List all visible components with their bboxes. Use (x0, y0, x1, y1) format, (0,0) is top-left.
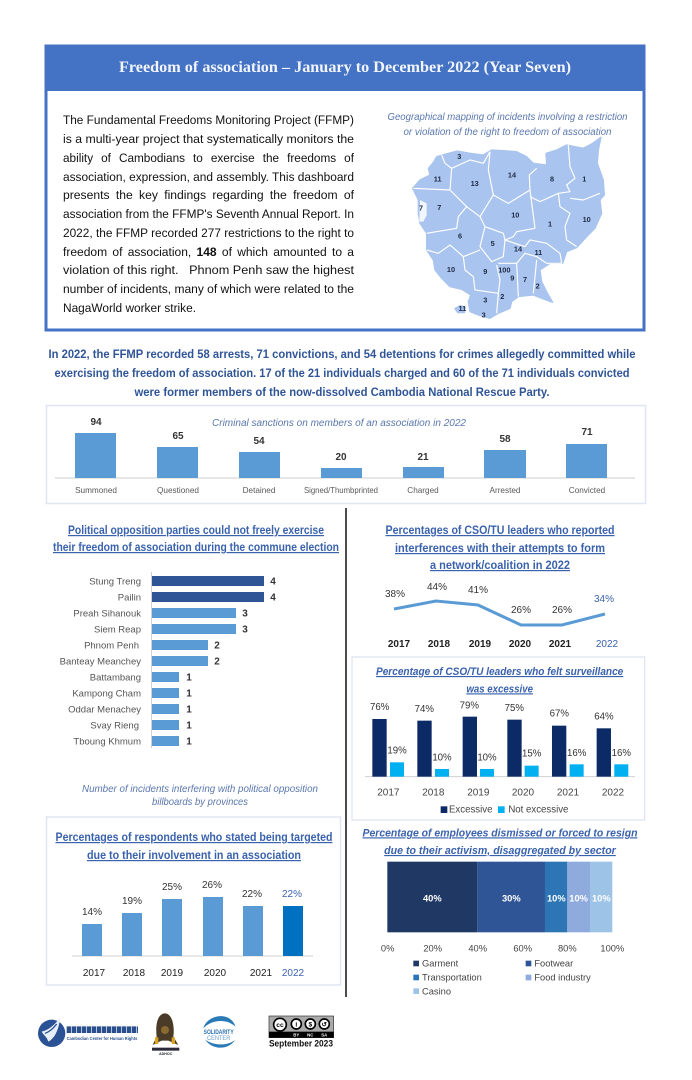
logo: ADHOC (152, 1013, 179, 1056)
logo: Solidarity Center (203, 1016, 236, 1048)
panel: employees dismissed by sector (362, 827, 637, 996)
map of Cambodia by province: 13 (471, 179, 479, 188)
caption: billboards (82, 784, 318, 808)
panel: respondents targeted: 2022 (282, 968, 305, 979)
panel: criminal sanctions bar chart: 65 (172, 431, 184, 442)
legend: Garment (422, 959, 459, 969)
line chart: network interference: 2017 (388, 639, 411, 650)
horizontal bar chart: incidents by province: Battambang (90, 672, 141, 684)
heading: network/coalition interference: a network/coalition in 2022 (430, 558, 570, 572)
map of Cambodia by province: 5 (491, 239, 495, 248)
panel heading: due to their activism, disaggregated by sector (384, 845, 616, 857)
logo: Cambodian Center for Human Rights: Cambodian Center for Human Rights (67, 1036, 138, 1041)
horizontal bar chart: incidents by province: 1 (186, 704, 192, 716)
line chart: network interference: 2022 (596, 639, 619, 650)
stacked bar: 30% (502, 893, 521, 903)
panel: criminal sanctions bar chart: 58 (499, 434, 511, 445)
panel: respondents targeted: 2019 (161, 968, 184, 979)
horizontal bar chart: incidents by province: 3 (242, 608, 248, 620)
panel: respondents targeted (46, 817, 340, 985)
map of Cambodia by province: 10 (447, 265, 455, 274)
panel: criminal sanctions bar chart: Questioned (157, 486, 199, 495)
map of Cambodia by province: 10 (511, 211, 519, 220)
intro text block: association, expression, and assembly. This dashboard (63, 170, 354, 184)
stacked bar (387, 862, 612, 932)
legend: Food industry (534, 973, 591, 983)
panel: surveillance bar chart: 10% (432, 753, 452, 764)
map of Cambodia by province: 2 (500, 292, 504, 301)
panel heading: Percentages of respondents who stated being targeted (56, 830, 332, 844)
map of Cambodia by province: 14 (514, 244, 523, 253)
panel: criminal sanctions bar chart: Summoned (75, 486, 117, 495)
horizontal bar chart: incidents by province (60, 572, 276, 748)
panel: employees dismissed by sector: 40% (468, 943, 487, 953)
map of Cambodia by province: 6 (458, 232, 462, 241)
intro text block: NagaWorld worker strike. (63, 301, 196, 315)
panel: surveillance bar chart: 19% (387, 746, 407, 757)
line chart: network interference: 26% (511, 605, 531, 616)
license badge and date (269, 1016, 334, 1049)
license badge and date: September 2023 (269, 1039, 333, 1049)
intro text block: The Fundamental Freedoms Monitoring Project (FFMP) (63, 113, 354, 127)
caption: billboards: billboards by provinces (152, 797, 248, 808)
logo: Solidarity Center: CENTER (207, 1036, 231, 1042)
line chart: network interference: 44% (427, 582, 447, 593)
horizontal bar chart: incidents by province: Siem Reap (94, 624, 141, 636)
map caption: Geographical mapping of incidents involving a restriction (388, 112, 628, 123)
panel heading: due to their involvement in an association (87, 848, 301, 862)
panel: criminal sanctions bar chart: 21 (417, 452, 429, 463)
map of Cambodia by province: 14 (508, 171, 517, 180)
panel: respondents targeted: 22% (282, 889, 302, 900)
panel: respondents targeted: 2018 (123, 968, 146, 979)
license badge and date: cc (276, 1022, 284, 1029)
line chart: network interference: 34% (594, 594, 614, 605)
map of Cambodia by province: 10 (583, 215, 591, 224)
panel: introduction and map (45, 45, 645, 330)
horizontal bar chart: incidents by province: Phnom Penh (84, 640, 139, 652)
intro text block: freedom of association, 148 of which amounted to a (63, 245, 354, 259)
intro text block: ability of Cambodians to exercise the freedoms of (63, 151, 355, 165)
license badge and date: NC (307, 1032, 313, 1037)
line chart: network interference: 2018 (428, 639, 451, 650)
panel: criminal sanctions bar chart: 94 (90, 417, 102, 428)
horizontal bar chart: incidents by province: 4 (270, 576, 276, 588)
legend: Transportation (422, 973, 482, 983)
license badge and date: BY (293, 1032, 299, 1037)
horizontal bar chart: incidents by province: 1 (186, 736, 192, 748)
panel: respondents targeted: 22% (242, 889, 262, 900)
title banner: Freedom of association – January to December 2022 (Year Seven) (119, 59, 571, 76)
map of Cambodia by province: 1 (582, 175, 586, 184)
panel: surveillance bar chart: 16% (612, 748, 631, 759)
panel: surveillance bar chart: 2019 (467, 788, 490, 799)
map of Cambodia by province: 7 (419, 204, 423, 213)
line chart: network interference: 26% (552, 605, 572, 616)
license badge and date: i (295, 1022, 297, 1029)
horizontal bar chart: incidents by province: Pailin (118, 592, 141, 604)
lead statement: In 2022, the FFMP recorded 58 arrests, 71 convictions, and 54 detentions for crimes allegedly committed while (48, 347, 636, 361)
panel: surveillance bar chart: 2018 (422, 788, 445, 799)
panel: surveillance bar chart: 64% (594, 711, 614, 722)
panel: surveillance bar chart: 75% (505, 703, 524, 714)
map of Cambodia by province: 11 (534, 248, 542, 257)
intro text block: violation of this right. Phnom Penh saw the highest (63, 263, 355, 277)
panel: criminal sanctions bar chart: 54 (253, 436, 265, 447)
line chart: network interference (385, 582, 619, 650)
logo: ADHOC: ADHOC (159, 1052, 173, 1056)
map of Cambodia by province: 3 (482, 310, 486, 319)
panel heading: Percentage of employees dismissed or forced to resign (362, 827, 637, 839)
panel: surveillance bar chart: 15% (522, 749, 542, 760)
panel heading (362, 827, 637, 857)
panel heading: Percentage of CSO/TU leaders who felt surveillance (376, 666, 624, 678)
lead statement: were former members of the now-dissolved Cambodia National Rescue Party. (134, 385, 550, 399)
panel: surveillance bar chart: 10% (477, 753, 497, 764)
legend: Not excessive (508, 805, 568, 816)
caption: billboards: Number of incidents interfering with political opposition (82, 784, 318, 795)
horizontal bar chart: incidents by province: Stung Treng (89, 576, 141, 588)
map of Cambodia by province: 3 (483, 296, 487, 305)
panel: surveillance bar chart: 67% (550, 709, 569, 720)
logo: Cambodian Center for Human Rights (38, 1017, 138, 1047)
legend: Casino (422, 986, 451, 996)
horizontal bar chart: incidents by province: 1 (186, 672, 192, 684)
panel: respondents targeted: 2021 (250, 968, 273, 979)
intro text block: is a multi-year project that systematically monitors the (63, 132, 354, 146)
stacked bar: 40% (423, 893, 442, 903)
map of Cambodia by province: 7 (437, 203, 441, 212)
panel: surveillance bar chart: 16% (567, 748, 587, 759)
panel: surveillance bar chart: 76% (370, 702, 390, 713)
license badge and date: ↺ (322, 1022, 328, 1029)
horizontal bar chart: incidents by province: 1 (186, 720, 192, 732)
legend (413, 959, 591, 996)
panel: criminal sanctions bar chart: Convicted (569, 486, 606, 495)
panel: employees dismissed by sector: 0% (381, 943, 394, 953)
line chart: network interference: 41% (468, 585, 488, 596)
title banner (45, 45, 645, 91)
intro text block (63, 113, 355, 315)
logo: Solidarity Center: SOLIDARITY (204, 1029, 234, 1036)
lead statement (48, 347, 636, 399)
legend: Excessive (449, 805, 492, 816)
horizontal bar chart: incidents by province: 2 (214, 640, 220, 652)
panel: respondents targeted: 25% (162, 882, 182, 893)
panel heading (56, 830, 332, 862)
panel: respondents targeted: 19% (122, 896, 142, 907)
horizontal bar chart: incidents by province: 3 (242, 624, 248, 636)
intro text block: number of incidents, many of which were related to the (63, 282, 354, 296)
horizontal bar chart: incidents by province: Preah Sihanouk (73, 608, 141, 620)
map of Cambodia by province (413, 137, 604, 319)
map of Cambodia by province: 9 (483, 267, 487, 276)
panel: surveillance bar chart (352, 657, 645, 820)
panel heading: was excessive (466, 683, 533, 695)
panel: criminal sanctions bar chart: Charged (407, 486, 439, 495)
panel: surveillance bar chart: 2021 (557, 788, 580, 799)
heading: political opposition: Political opposition parties could not freely exercise (68, 523, 324, 537)
panel: criminal sanctions bar chart: Signed/Thumbprinted (304, 486, 378, 495)
stacked bar: 10% (547, 893, 566, 903)
panel: employees dismissed by sector: 80% (558, 943, 577, 953)
horizontal bar chart: incidents by province: Banteay Meanchey (60, 656, 141, 668)
panel: respondents targeted: 26% (202, 880, 222, 891)
line chart: network interference: 38% (385, 589, 405, 600)
stacked bar: 10% (592, 893, 611, 903)
panel: surveillance bar chart: 79% (460, 700, 479, 711)
map of Cambodia by province: 9 (510, 273, 514, 282)
stacked bar: 10% (569, 893, 589, 903)
panel: criminal sanctions bar chart: 71 (581, 427, 593, 438)
map of Cambodia by province: 7 (523, 275, 527, 284)
panel: surveillance bar chart: 2020 (512, 788, 535, 799)
horizontal bar chart: incidents by province: 1 (186, 688, 192, 700)
intro text block: presents the key findings regarding the freedom of (63, 188, 355, 202)
map of Cambodia by province: 1 (548, 219, 552, 228)
heading: network/coalition interference (386, 523, 614, 572)
line chart: network interference: 2019 (469, 639, 492, 650)
panel: respondents targeted: 14% (82, 907, 102, 918)
legend: Footwear (534, 959, 573, 969)
panel: criminal sanctions bar chart: Arrested (490, 486, 521, 495)
map of Cambodia by province: 3 (457, 152, 461, 161)
horizontal bar chart: incidents by province: 2 (214, 656, 220, 668)
license badge and date: SA (321, 1032, 328, 1037)
license badge and date: $ (308, 1022, 312, 1029)
panel: criminal sanctions bar chart (46, 406, 646, 504)
panel: respondents targeted: 2020 (204, 968, 227, 979)
horizontal bar chart: incidents by province: Tboung Khmum (73, 736, 141, 748)
horizontal bar chart: incidents by province: Svay Rieng (90, 720, 139, 732)
horizontal bar chart: incidents by province: Oddar Menachey (68, 704, 141, 716)
horizontal bar chart: incidents by province: Kampong Cham (72, 688, 141, 700)
heading: political opposition: their freedom of association during the commune election (53, 540, 339, 554)
panel: employees dismissed by sector: 100% (600, 943, 624, 953)
panel: employees dismissed by sector: 20% (423, 943, 442, 953)
lead statement: exercising the freedom of association. 17 of the 21 individuals charged and 60 of the 71 individuals convicted (54, 366, 630, 380)
horizontal bar chart: incidents by province: 4 (270, 592, 276, 604)
panel: surveillance bar chart: 2022 (602, 788, 625, 799)
panel: respondents targeted: 2017 (83, 968, 106, 979)
panel: criminal sanctions bar chart: Detained (243, 486, 276, 495)
map of Cambodia by province: 2 (536, 282, 540, 291)
map of Cambodia by province: 8 (550, 175, 554, 184)
panel: criminal sanctions bar chart: 20 (335, 452, 347, 463)
intro text block: 2022, the FFMP recorded 277 restrictions to the right to (63, 226, 354, 240)
map of Cambodia by province: 11 (434, 175, 442, 184)
panel: surveillance bar chart: 2017 (377, 788, 400, 799)
heading: network/coalition interference: Percentages of CSO/TU leaders who reported (386, 523, 614, 537)
panel heading (376, 666, 624, 695)
legend (441, 805, 568, 816)
map of Cambodia by province: 100 (498, 265, 510, 274)
logos footer (38, 1013, 334, 1056)
heading: political opposition (53, 523, 339, 554)
panel: surveillance bar chart: 74% (415, 704, 434, 715)
chart caption: Criminal sanctions on members of an association in 2022 (212, 418, 466, 429)
panel: employees dismissed by sector: 60% (513, 943, 532, 953)
intro text block: association from the FFMP's Seventh Annual Report. In (63, 207, 354, 221)
map caption (388, 112, 628, 138)
line chart: network interference: 2020 (509, 639, 532, 650)
map caption: or violation of the right to freedom of association (404, 127, 612, 138)
line chart: network interference: 2021 (549, 639, 572, 650)
map of Cambodia by province: 11 (458, 304, 466, 313)
heading: network/coalition interference: interferences with their attempts to form (395, 541, 605, 555)
